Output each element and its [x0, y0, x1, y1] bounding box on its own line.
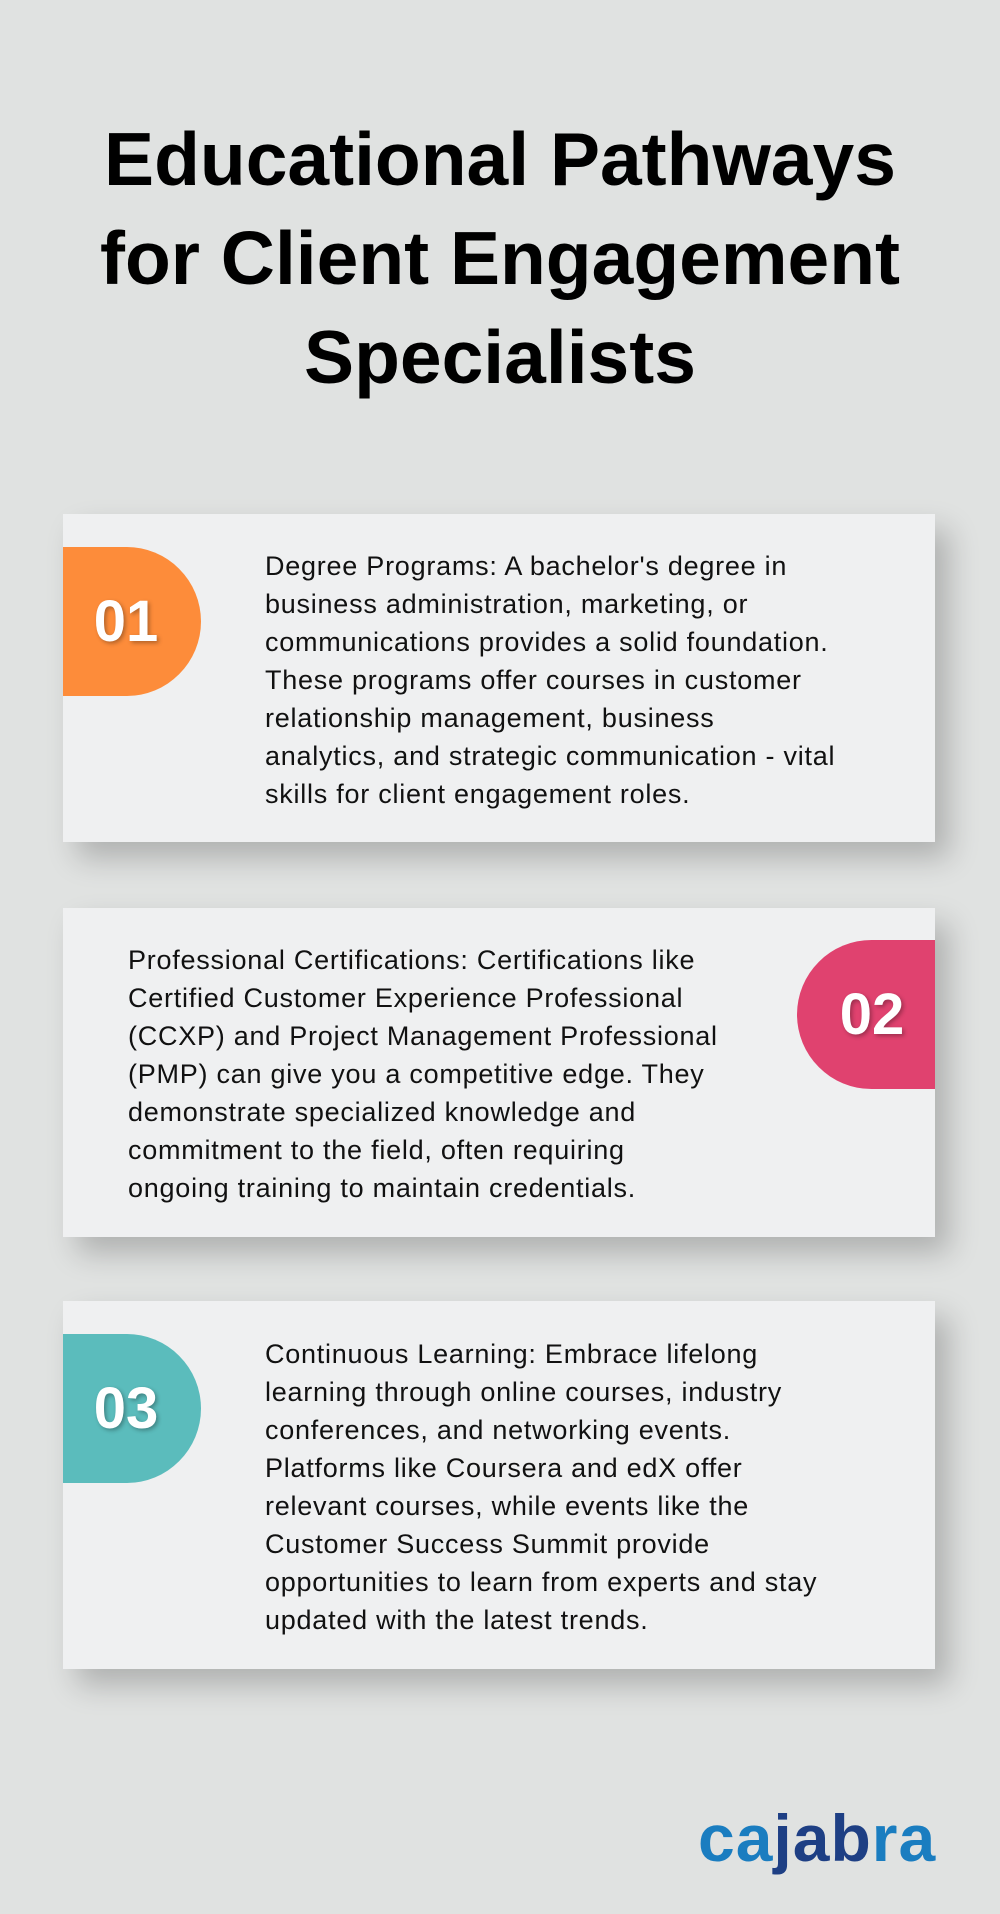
- text: degree programs: These programs offer courses in customer: [265, 665, 802, 695]
- text: continuous learning: opportunities to learn from experts and stay: [265, 1567, 817, 1597]
- text: continuous learning: Platforms like Coursera and edX offer: [265, 1453, 742, 1483]
- text: degree programs: business administration, marketing, or: [265, 589, 748, 619]
- badge 02: 02: [840, 982, 904, 1047]
- title: Educational Pathways: [104, 117, 896, 201]
- text: certifications: (CCXP) and Project Management Professional: [128, 1021, 718, 1051]
- text: continuous learning: relevant courses, while events like the: [265, 1491, 749, 1521]
- text: continuous learning: Continuous Learning: Embrace lifelong: [265, 1339, 758, 1369]
- text: certifications: demonstrate specialized knowledge and: [128, 1097, 636, 1127]
- text: degree programs: communications provides a solid foundation.: [265, 627, 829, 657]
- text: continuous learning: Customer Success Summit provide: [265, 1529, 710, 1559]
- text: certifications: (PMP) can give you a competitive edge. They: [128, 1059, 705, 1089]
- panel: degree programs: [63, 514, 935, 842]
- badge 02: [797, 940, 935, 1089]
- text: certifications: ongoing training to maintain credentials.: [128, 1173, 636, 1203]
- text: certifications: [128, 945, 718, 1203]
- text: degree programs: [265, 551, 835, 809]
- badge 01: [63, 547, 201, 696]
- logo: cajabra: [698, 1801, 936, 1875]
- text: certifications: Professional Certifications: Certifications like: [128, 945, 695, 975]
- title: for Client Engagement: [100, 216, 900, 300]
- title: [100, 117, 900, 399]
- title: Specialists: [304, 315, 696, 399]
- panel: continuous learning: [63, 1301, 935, 1669]
- text: certifications: commitment to the field, often requiring: [128, 1135, 625, 1165]
- badge 01: 01: [94, 589, 158, 654]
- text: degree programs: Degree Programs: A bachelor's degree in: [265, 551, 787, 581]
- badge 03: [63, 1334, 201, 1483]
- text: degree programs: skills for client engagement roles.: [265, 779, 690, 809]
- text: degree programs: relationship management, business: [265, 703, 714, 733]
- panel: professional certifications: [63, 908, 935, 1237]
- text: continuous learning: [265, 1339, 817, 1635]
- text: continuous learning: updated with the latest trends.: [265, 1605, 648, 1635]
- badge 03: 03: [94, 1376, 158, 1441]
- text: degree programs: analytics, and strategic communication - vital: [265, 741, 835, 771]
- text: certifications: Certified Customer Experience Professional: [128, 983, 683, 1013]
- text: continuous learning: conferences, and networking events.: [265, 1415, 731, 1445]
- text: continuous learning: learning through online courses, industry: [265, 1377, 782, 1407]
